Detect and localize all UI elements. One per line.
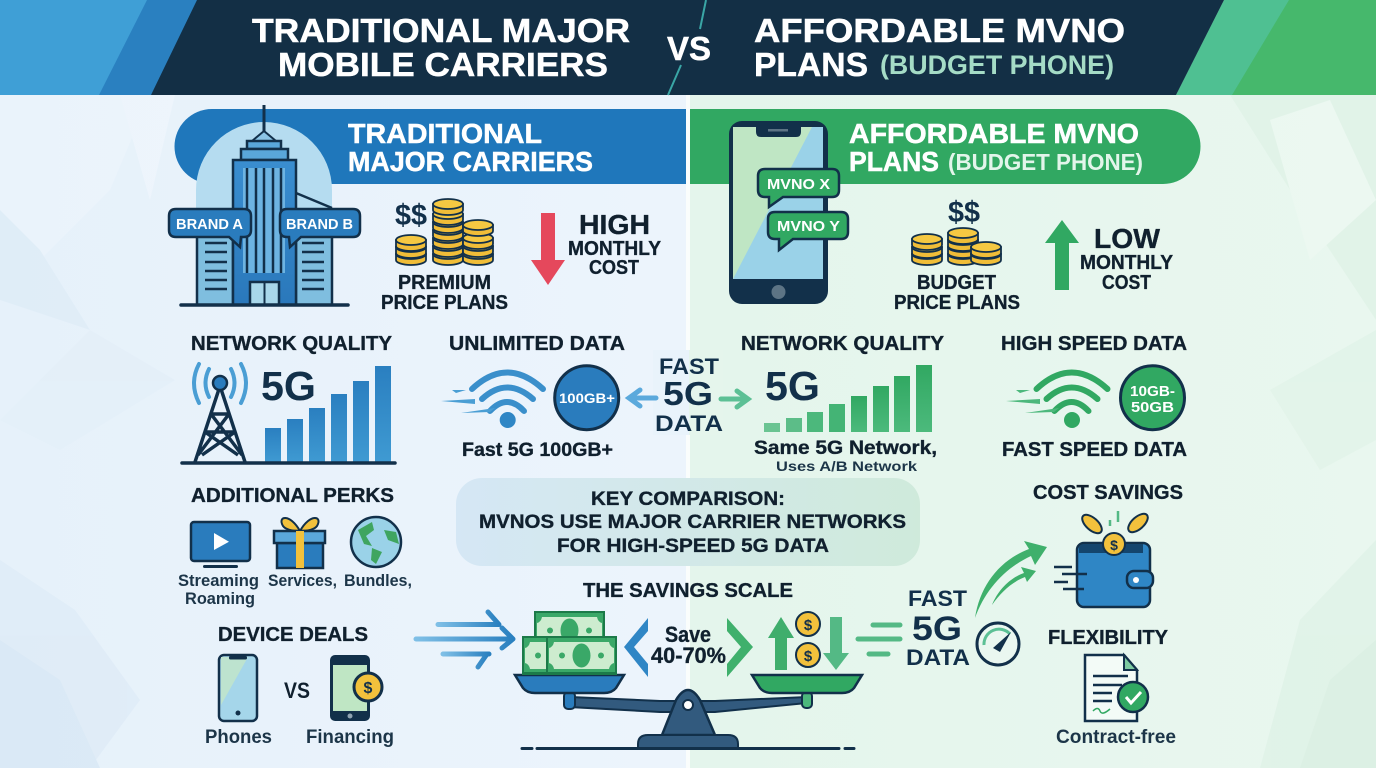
panel: device deals (205, 624, 394, 748)
text: low monthly cost (1080, 223, 1174, 294)
header band (0, 0, 1376, 95)
panel: device deals: DEVICE DEALS (218, 624, 368, 646)
arrows: green growth curves (975, 541, 1047, 618)
icon: phone (219, 655, 257, 721)
text: high monthly cost (568, 209, 662, 279)
chart: network quality MVNO: 5G (765, 363, 820, 409)
header title right: AFFORDABLE MVNO (754, 12, 1125, 49)
chart: network quality MVNO: NETWORK QUALITY (741, 333, 945, 355)
icon: high speed data wifi: HIGH SPEED DATA (1001, 333, 1187, 355)
center divider (686, 95, 690, 768)
icon: unlimited data wifi (441, 333, 625, 461)
icon: high speed data wifi: FAST SPEED DATA (1002, 439, 1187, 461)
text: save 40-70%: 40-70% (651, 643, 726, 668)
text: save 40-70%: Save (665, 622, 711, 647)
arrow: to MVNO network (721, 391, 748, 407)
text: budget price plans (894, 272, 1020, 314)
chart: network quality MVNO: Same 5G Network, (754, 438, 937, 459)
chart: network quality MVNO: Uses A/B Network (776, 458, 917, 474)
icon: streaming screen (191, 522, 250, 568)
icon: premium coin stacks: $$ (395, 199, 427, 232)
label: MVNO Y: MVNO Y (777, 218, 840, 235)
panel: additional perks: Bundles, (344, 571, 412, 590)
panel: additional perks (178, 485, 412, 608)
chart: network quality carriers (182, 333, 395, 463)
text: fast 5G data center: FAST (659, 354, 720, 379)
label: MVNO X (758, 169, 839, 207)
icon: high speed data wifi: 50GB (1131, 399, 1174, 416)
icon: speedometer (977, 623, 1019, 665)
text: fast 5G data right: DATA (906, 645, 970, 670)
header title left: MOBILE CARRIERS (278, 46, 608, 83)
icon: wallet with coins (1054, 511, 1153, 607)
icon: up down arrows with coins (768, 612, 849, 670)
panel: device deals: VS (284, 678, 310, 703)
arrow: low cost up (1045, 220, 1079, 290)
panel: key comparison: KEY COMPARISON: (591, 489, 785, 510)
icon: high speed data wifi (1001, 333, 1187, 461)
text: premium price plans (381, 272, 508, 314)
icon: phone financing (330, 655, 382, 721)
text: premium price plans: PRICE PLANS (381, 292, 508, 314)
icon: wallet with coins: $ (1110, 537, 1118, 553)
panel: affordable MVNO banner: (BUDGET PHONE) (948, 149, 1143, 175)
icon: unlimited data wifi: UNLIMITED DATA (449, 333, 625, 355)
text: fast 5G data center: 5G (663, 375, 713, 412)
text: premium price plans: PREMIUM (398, 272, 491, 294)
arrows: into scale left (416, 612, 513, 667)
icon: high speed data wifi: 10GB- (1130, 383, 1175, 400)
icon: budget coin stacks: $$ (948, 196, 980, 229)
panel: traditional carriers banner: TRADITIONAL (348, 118, 542, 149)
panel: device deals: Financing (306, 727, 394, 748)
icon: premium coin stacks (395, 199, 493, 265)
arrows: green speed dashes (858, 625, 900, 654)
header title right (754, 12, 1125, 83)
panel: key comparison (456, 478, 920, 566)
text: contract-free: Contract-free (1056, 727, 1176, 748)
icon: smartphone with MVNO labels (729, 121, 848, 304)
label: Brand A (169, 209, 251, 247)
label: Brand B: BRAND B (286, 216, 353, 233)
heading: the savings scale: THE SAVINGS SCALE (583, 580, 793, 602)
panel: affordable MVNO banner: PLANS (849, 146, 939, 177)
panel: affordable MVNO banner (690, 109, 1201, 184)
chart: network quality carriers: NETWORK QUALITY (191, 333, 393, 355)
label: MVNO X: MVNO X (767, 176, 830, 193)
background: right green half (689, 95, 1376, 768)
chart: network quality MVNO (741, 333, 945, 474)
heading: cost savings: COST SAVINGS (1033, 482, 1183, 504)
icon: globe (351, 517, 401, 567)
text: fast 5G data center: DATA (655, 411, 723, 436)
text: high monthly cost: COST (589, 257, 639, 279)
chart: network quality carriers: 5G (261, 363, 316, 409)
label: Brand A: BRAND A (176, 216, 243, 233)
text: high monthly cost: HIGH (579, 209, 650, 240)
panel: affordable MVNO banner: AFFORDABLE MVNO (849, 118, 1139, 149)
icon: up down arrows with coins: $ (804, 617, 813, 634)
text: low monthly cost: COST (1102, 272, 1151, 294)
panel: key comparison: FOR HIGH-SPEED 5G DATA (557, 535, 829, 557)
icon: gift box (274, 518, 325, 568)
text: high monthly cost: MONTHLY (568, 238, 662, 260)
text: fast 5G data center (653, 350, 723, 436)
header title right: PLANS (754, 46, 868, 83)
icon: balance scale (515, 675, 862, 748)
icon: unlimited data wifi: 100GB+ (559, 390, 615, 406)
header title left (252, 12, 630, 83)
panel: additional perks: ADDITIONAL PERKS (191, 485, 394, 507)
text: fast 5G data right: 5G (912, 610, 962, 648)
text: fast 5G data right (906, 586, 970, 670)
icon: contract document (1085, 655, 1148, 721)
panel: traditional carriers banner (175, 109, 686, 184)
text: fast 5G data right: FAST (908, 586, 968, 611)
text: budget price plans: PRICE PLANS (894, 292, 1020, 314)
icon: up down arrows with coins: $ (804, 648, 813, 665)
icon: carrier tower building (169, 105, 360, 305)
icon: budget coin stacks (912, 196, 1001, 265)
icon: cash stack (523, 612, 616, 675)
panel: additional perks: Services, (268, 571, 337, 590)
arrow: green chevron (727, 618, 753, 677)
text: save 40-70% (651, 622, 726, 668)
header VS: VS (667, 30, 711, 67)
icon: unlimited data wifi: Fast 5G 100GB+ (462, 440, 613, 461)
arrow: to 100GB (629, 390, 656, 406)
arrow: blue chevron (624, 618, 648, 677)
text: low monthly cost: LOW (1094, 223, 1161, 254)
panel: key comparison: MVNOS USE MAJOR CARRIER NETWORKS (479, 511, 906, 533)
text: budget price plans: BUDGET (917, 272, 996, 294)
panel: traditional carriers banner: MAJOR CARRIERS (348, 146, 593, 177)
background: left blue half (0, 95, 687, 768)
arrow: high cost down (531, 213, 565, 285)
icon: phone financing: $ (364, 680, 373, 697)
scale pan left (515, 675, 624, 693)
label: Brand B (280, 209, 360, 247)
text: low monthly cost: MONTHLY (1080, 252, 1174, 274)
panel: device deals: Phones (205, 727, 272, 748)
header title left: TRADITIONAL MAJOR (252, 12, 630, 49)
scale pan right (752, 675, 862, 693)
header title right: (BUDGET PHONE) (880, 50, 1114, 80)
heading: flexibility: FLEXIBILITY (1048, 627, 1169, 649)
label: MVNO Y (768, 212, 848, 250)
panel: additional perks: Roaming (185, 589, 255, 608)
panel: additional perks: Streaming (178, 571, 259, 590)
